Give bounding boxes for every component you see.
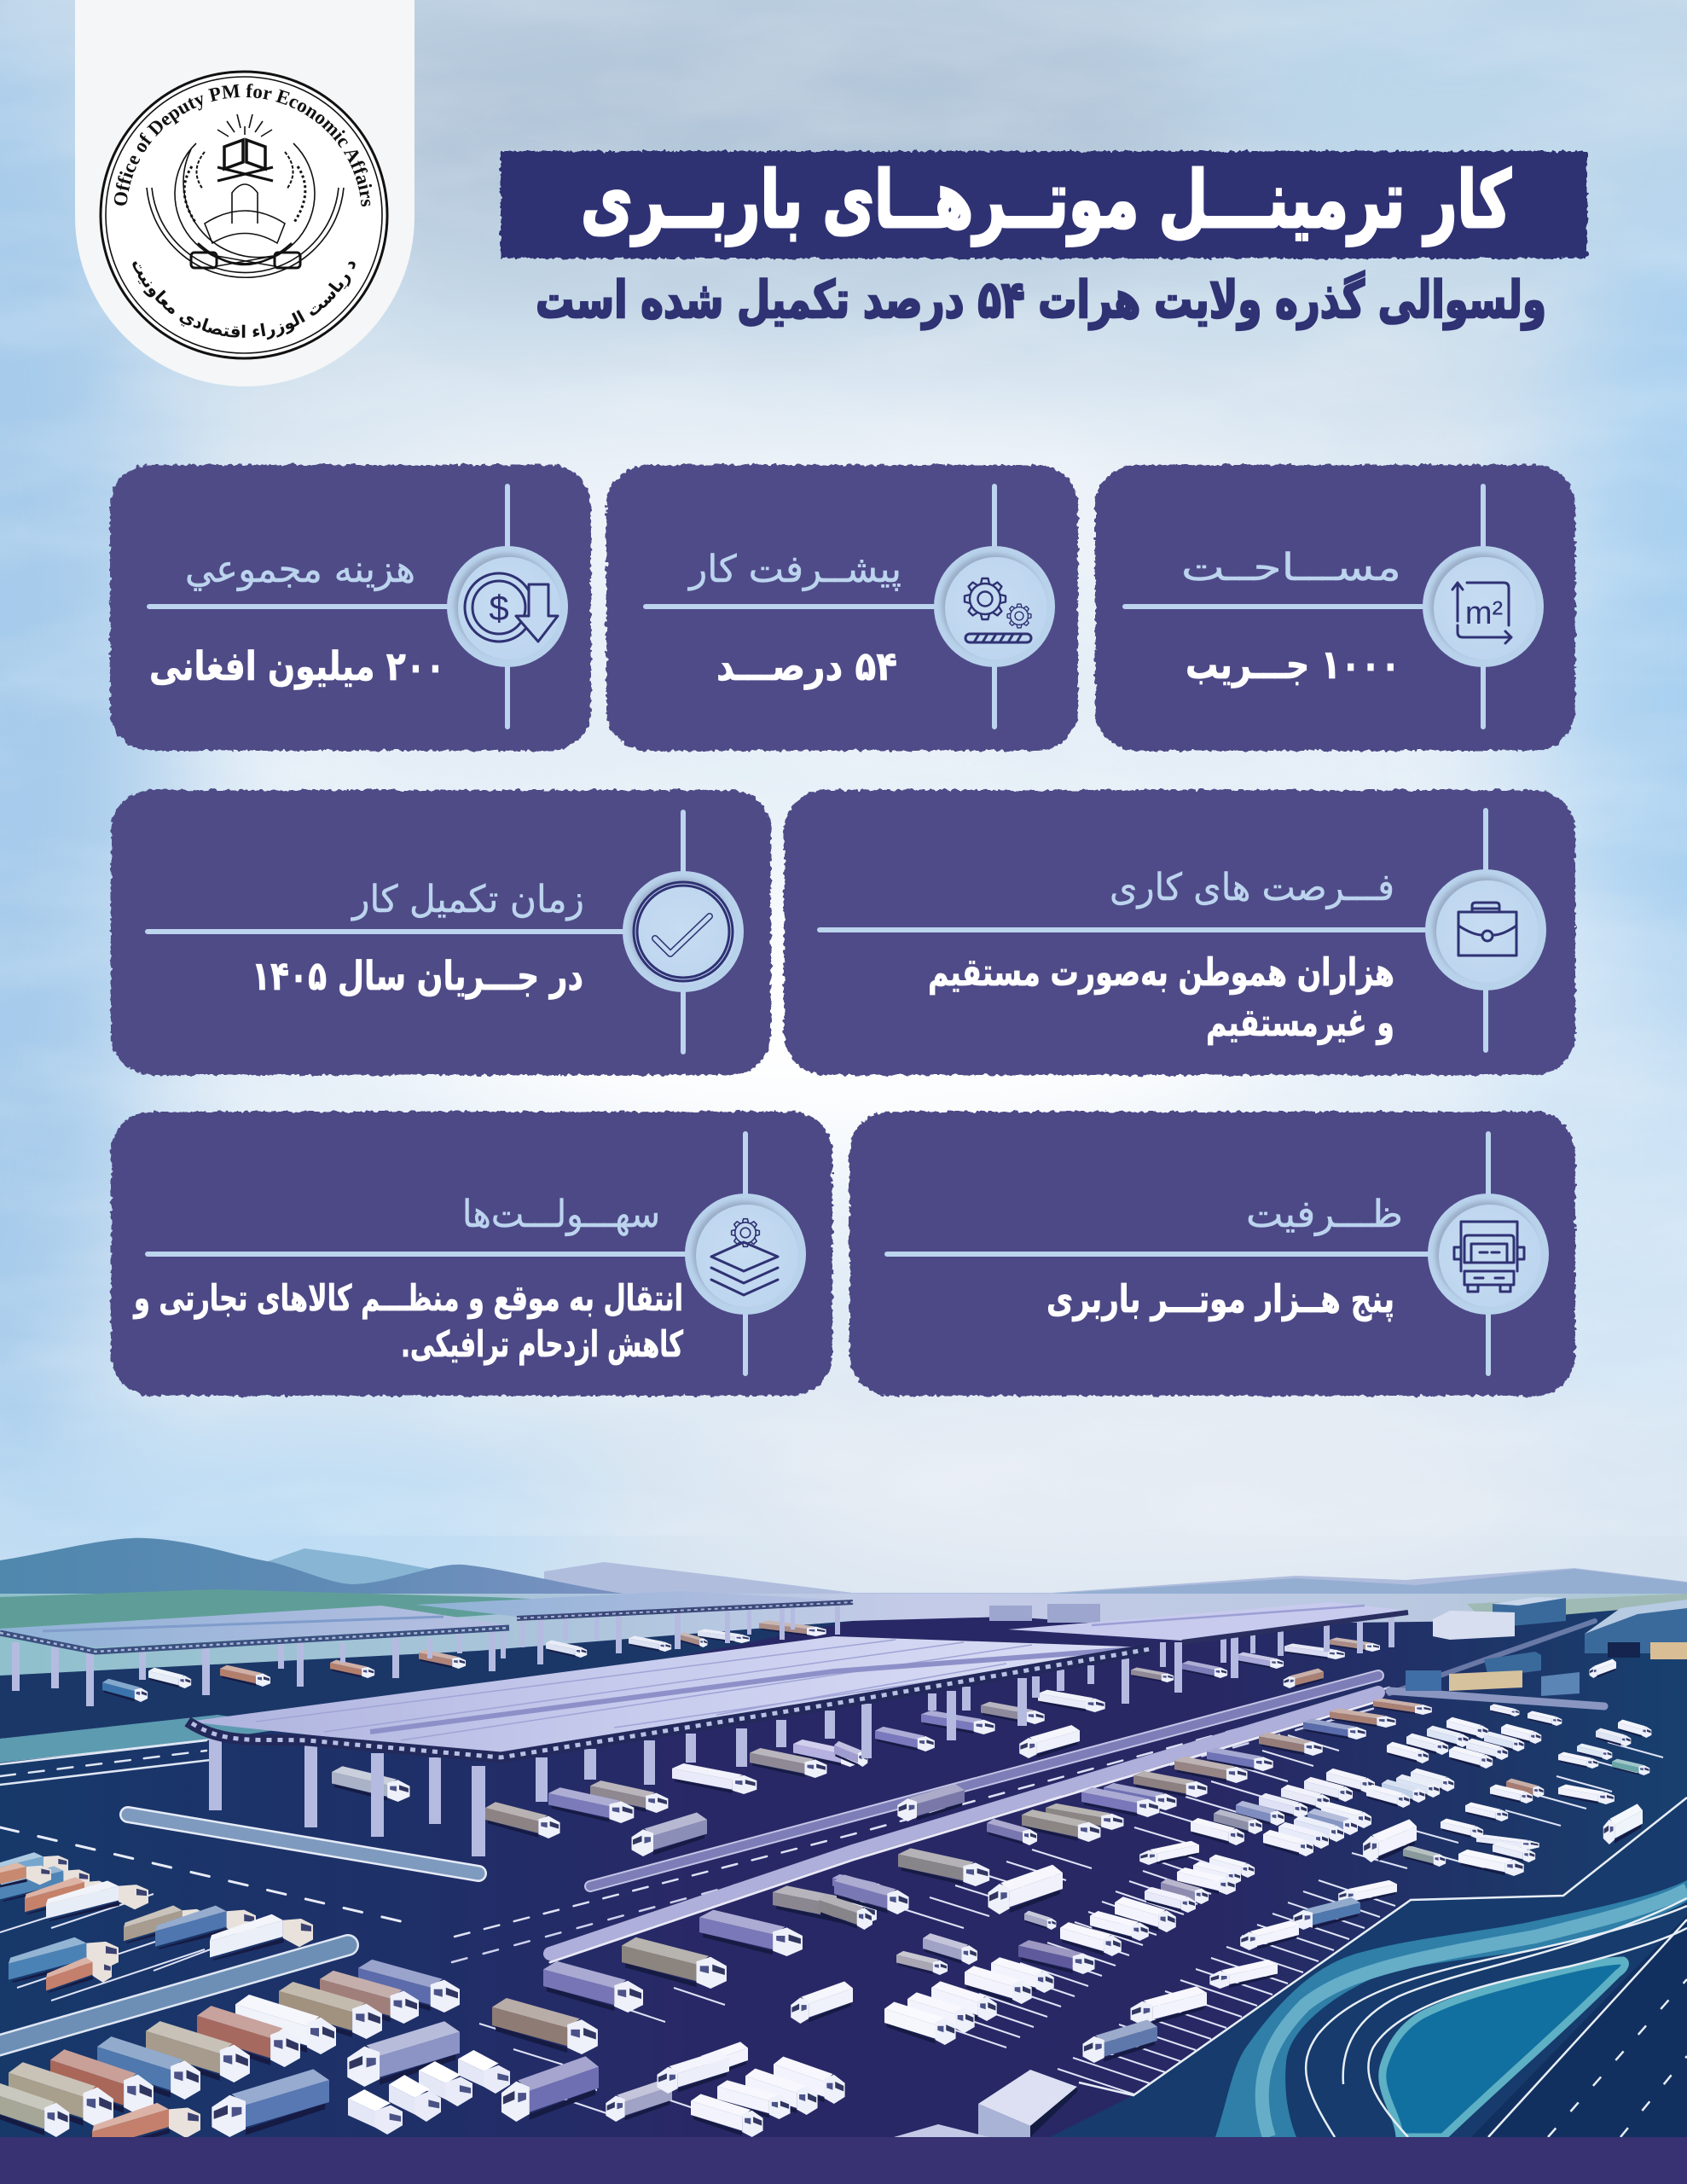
icon: square metre: m² bbox=[1465, 595, 1503, 631]
value: ۱۰۰۰ جـــریب bbox=[1186, 642, 1400, 688]
parking lines bbox=[0, 1721, 1663, 2116]
seal pashto text: د ریاست الوزراء اقتصادي معاونیت bbox=[133, 261, 356, 340]
subtitle: ولسوالی گذره ولایت هرات ۵۴ درصد تکمیل شده است bbox=[536, 270, 1546, 330]
logo: white tab with seal bbox=[75, 0, 415, 386]
far trucks bbox=[102, 1621, 1616, 1856]
heading: سهـــولـــت‌ها bbox=[462, 1193, 660, 1236]
value: انتقال به موقع و منظـــم کالاهای تجارتی و bbox=[133, 1277, 683, 1320]
back warehouses bbox=[989, 1597, 1687, 1696]
heading: ظـــرفیت bbox=[1246, 1193, 1403, 1236]
panel: total cost bbox=[110, 465, 591, 751]
heading: فـــرصت های کاری bbox=[1110, 866, 1394, 909]
canopy columns bbox=[12, 1602, 1394, 1856]
heading: پیشــرفت کار bbox=[687, 548, 901, 591]
icon: check mark bbox=[623, 871, 744, 992]
panel: capacity bbox=[849, 1112, 1575, 1396]
interchange bbox=[1050, 1798, 1687, 2137]
title banner bbox=[501, 151, 1587, 258]
value: در جـــریان سال ۱۴۰۵ bbox=[252, 953, 583, 1000]
scene: truck terminal illustration bbox=[0, 1538, 1687, 2152]
footer bar bbox=[0, 2137, 1687, 2184]
heading: زمان تکمیل کار bbox=[351, 878, 584, 921]
panel: job opportunities: و غیرمستقیم bbox=[1206, 1000, 1394, 1045]
panel: area bbox=[1095, 465, 1575, 751]
heading: هزینه مجموعي bbox=[185, 548, 415, 591]
main ground bbox=[0, 1604, 1687, 2137]
value: هزاران هموطن به‌صورت مستقیم bbox=[928, 950, 1394, 995]
seal english text: Office of Deputy PM for Economic Affairs bbox=[114, 84, 372, 206]
green field and land bbox=[0, 1594, 1687, 1713]
icon: briefcase bbox=[1425, 869, 1546, 990]
panel: completion time bbox=[111, 790, 771, 1075]
icon: truck bbox=[1428, 1194, 1549, 1315]
value: ۵۴ درصـــد bbox=[716, 643, 897, 690]
heading: مســـاحــت bbox=[1181, 546, 1401, 590]
seal rings bbox=[101, 72, 387, 358]
value: پنج هــزار موتـــر باربری bbox=[1046, 1276, 1394, 1321]
canopies bbox=[0, 1591, 1408, 1757]
panel: work progress bbox=[606, 465, 1078, 751]
icon: square metre bbox=[1423, 546, 1544, 667]
icon: dollar with down arrow bbox=[447, 546, 568, 667]
mountains bbox=[0, 1538, 1687, 1621]
panel: facilities bbox=[111, 1112, 832, 1396]
icon: gear over layers bbox=[685, 1194, 806, 1315]
roads and medians bbox=[0, 1621, 1604, 2048]
depot box building bbox=[894, 2070, 1077, 2137]
icon: dollar with down arrow: $ bbox=[489, 588, 509, 628]
panel: job opportunities bbox=[784, 790, 1575, 1075]
back lot bbox=[0, 1621, 853, 1739]
near trucks bbox=[0, 1699, 1651, 2152]
icon: gears and progress bar bbox=[934, 546, 1055, 667]
emblem bbox=[147, 114, 344, 277]
panel: facilities: کاهش ازدحام ترافیکی. bbox=[401, 1323, 683, 1366]
value: ۲۰۰ میلیون افغانی bbox=[149, 643, 445, 690]
